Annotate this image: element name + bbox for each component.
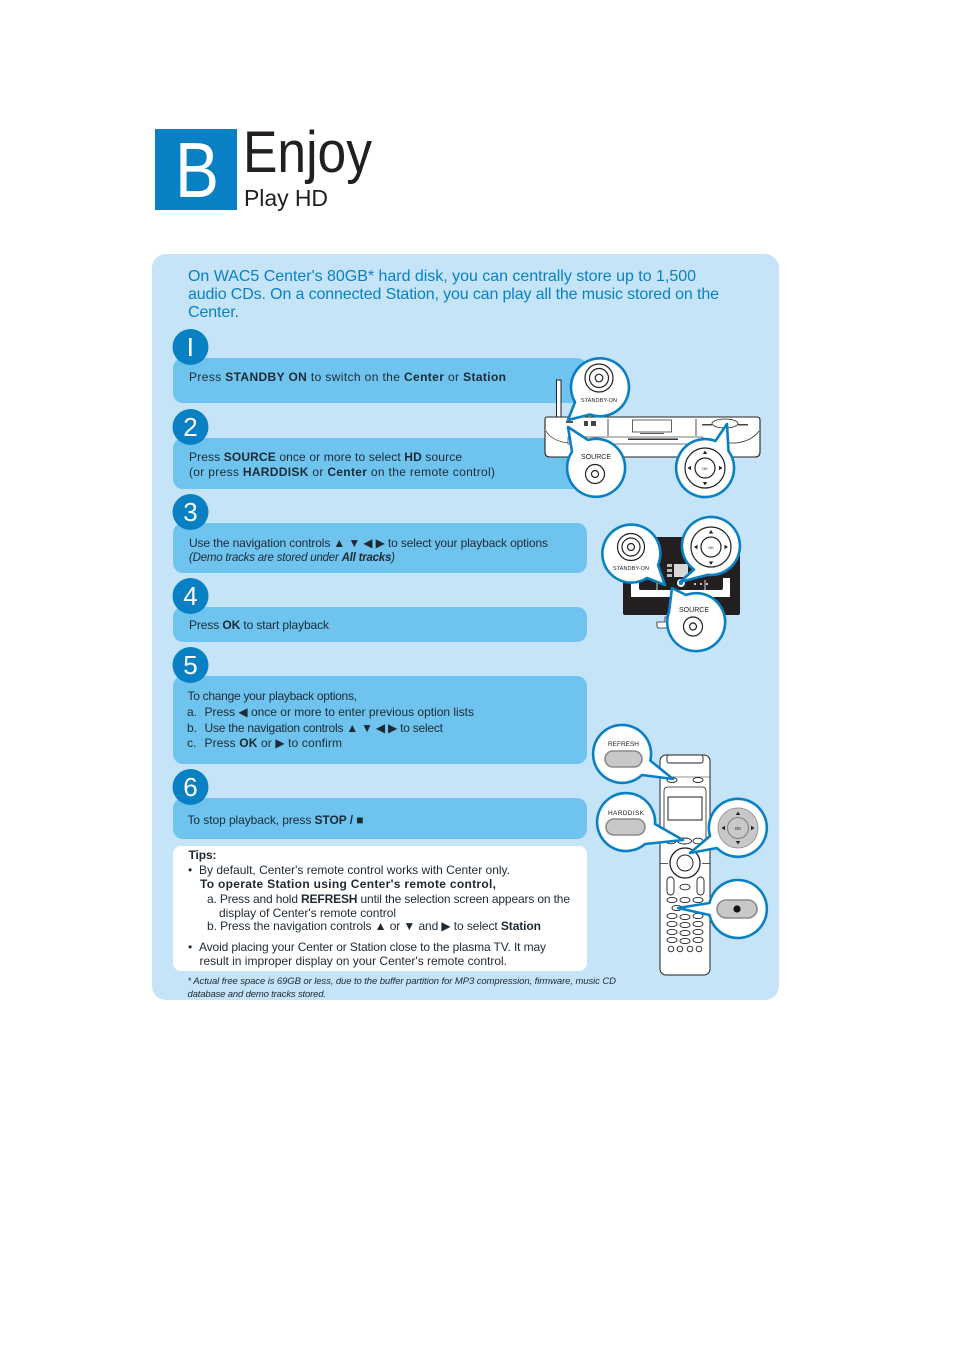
intro text: audio CDs. On a connected Station, you can play all the music stored on the: [188, 286, 719, 303]
step 6 bar: 6: [183, 772, 198, 802]
antenna: [556, 380, 561, 418]
callout: standby-on: STANDBY-ON: [613, 566, 649, 572]
callout: harddisk: [597, 793, 683, 851]
step 2 bar: Press SOURCE once or more to select HD source: [189, 450, 462, 464]
illustration: remote control with callouts: [593, 725, 767, 975]
tips box: Tips:: [188, 848, 216, 862]
step 5 bar: 5: [183, 650, 198, 680]
step 4 bar: Press OK to start playback: [189, 618, 330, 632]
remote control body: [660, 755, 710, 975]
step 5 bar: a.: [187, 705, 197, 719]
step 5 bar: Press OK or ▶ to confirm: [204, 736, 342, 750]
step 3 bar: 3: [183, 497, 198, 527]
step 4 bar: 4: [183, 581, 198, 611]
footnote: [188, 976, 616, 1000]
step 5 bar: Press ◀ once or more to enter previous option lists: [204, 705, 474, 719]
callout: navigation: OK: [735, 826, 741, 831]
step 3 bar: [172, 494, 587, 573]
callout: refresh: [593, 725, 673, 783]
step 5 bar: [172, 647, 587, 764]
illustration: station unit with callouts: [602, 517, 740, 651]
callout: source: [567, 427, 625, 497]
tips box: •: [188, 863, 192, 877]
tips box: To operate Station using Center's remote control,: [200, 877, 496, 891]
illustration: center unit with callouts: [545, 358, 760, 497]
step 1 bar: Press STANDBY ON to switch on the Center or Station: [189, 370, 506, 384]
tips box: a. Press and hold REFRESH until the selection screen appears on the: [207, 892, 570, 906]
tips box: Avoid placing your Center or Station close to the plasma TV. It may: [199, 940, 546, 954]
callout: source: SOURCE: [581, 454, 611, 461]
step 2 bar: [172, 409, 587, 489]
step 5 bar: To change your playback options,: [188, 689, 357, 703]
intro text: On WAC5 Center's 80GB* hard disk, you can centrally store up to 1,500: [188, 268, 696, 285]
tips box: b. Press the navigation controls ▲ or ▼ and ▶ to select Station: [207, 919, 541, 933]
center unit body: [545, 417, 760, 457]
callout: navigation: [690, 799, 767, 857]
step 6 bar: [172, 769, 587, 839]
step 1 bar: [172, 329, 587, 403]
tips box: display of Center's remote control: [219, 906, 396, 920]
callout: standby-on: [568, 358, 629, 420]
footnote: * Actual free space is 69GB or less, due to the buffer partition for MP3 compression, firmware, music CD: [188, 976, 616, 987]
callout: navigation: OK: [702, 466, 708, 471]
callout: source: SOURCE: [679, 607, 709, 614]
tips box: [173, 846, 587, 971]
callout: standby-on: STANDBY-ON: [581, 398, 617, 404]
section badge B: [155, 126, 237, 214]
step 5 bar: b.: [187, 721, 197, 735]
intro text: [188, 268, 719, 321]
step 5 bar: c.: [187, 736, 196, 750]
step 2 bar: 2: [183, 412, 198, 442]
step 4 bar: [172, 578, 587, 642]
intro text: Center.: [188, 304, 239, 321]
step 3 bar: Use the navigation controls ▲ ▼ ◀ ▶ to select your playback options: [189, 536, 548, 550]
step 2 bar: (or press HARDDISK or Center on the remote control): [189, 465, 495, 479]
title: Enjoy: [243, 120, 372, 185]
subtitle: Play HD: [244, 185, 328, 211]
callout: navigation: [676, 424, 734, 497]
main panel: [152, 254, 779, 1000]
callout: harddisk: HARDDISK: [608, 810, 645, 817]
footnote: database and demo tracks stored.: [188, 989, 326, 1000]
callout: navigation: OK: [708, 545, 714, 550]
tips box: •: [188, 940, 192, 954]
callout: stop: [678, 880, 767, 938]
callout: refresh: REFRESH: [608, 741, 639, 748]
step 6 bar: To stop playback, press STOP / ■: [188, 813, 364, 827]
tips box: result in improper display on your Center's remote control.: [200, 954, 507, 968]
section badge B: B: [175, 126, 219, 214]
station unit body: [623, 537, 740, 628]
step 5 bar: Use the navigation controls ▲ ▼ ◀ ▶ to select: [204, 721, 444, 735]
tips box: By default, Center's remote control works with Center only.: [199, 863, 510, 877]
step 3 bar: (Demo tracks are stored under All tracks): [189, 552, 395, 564]
